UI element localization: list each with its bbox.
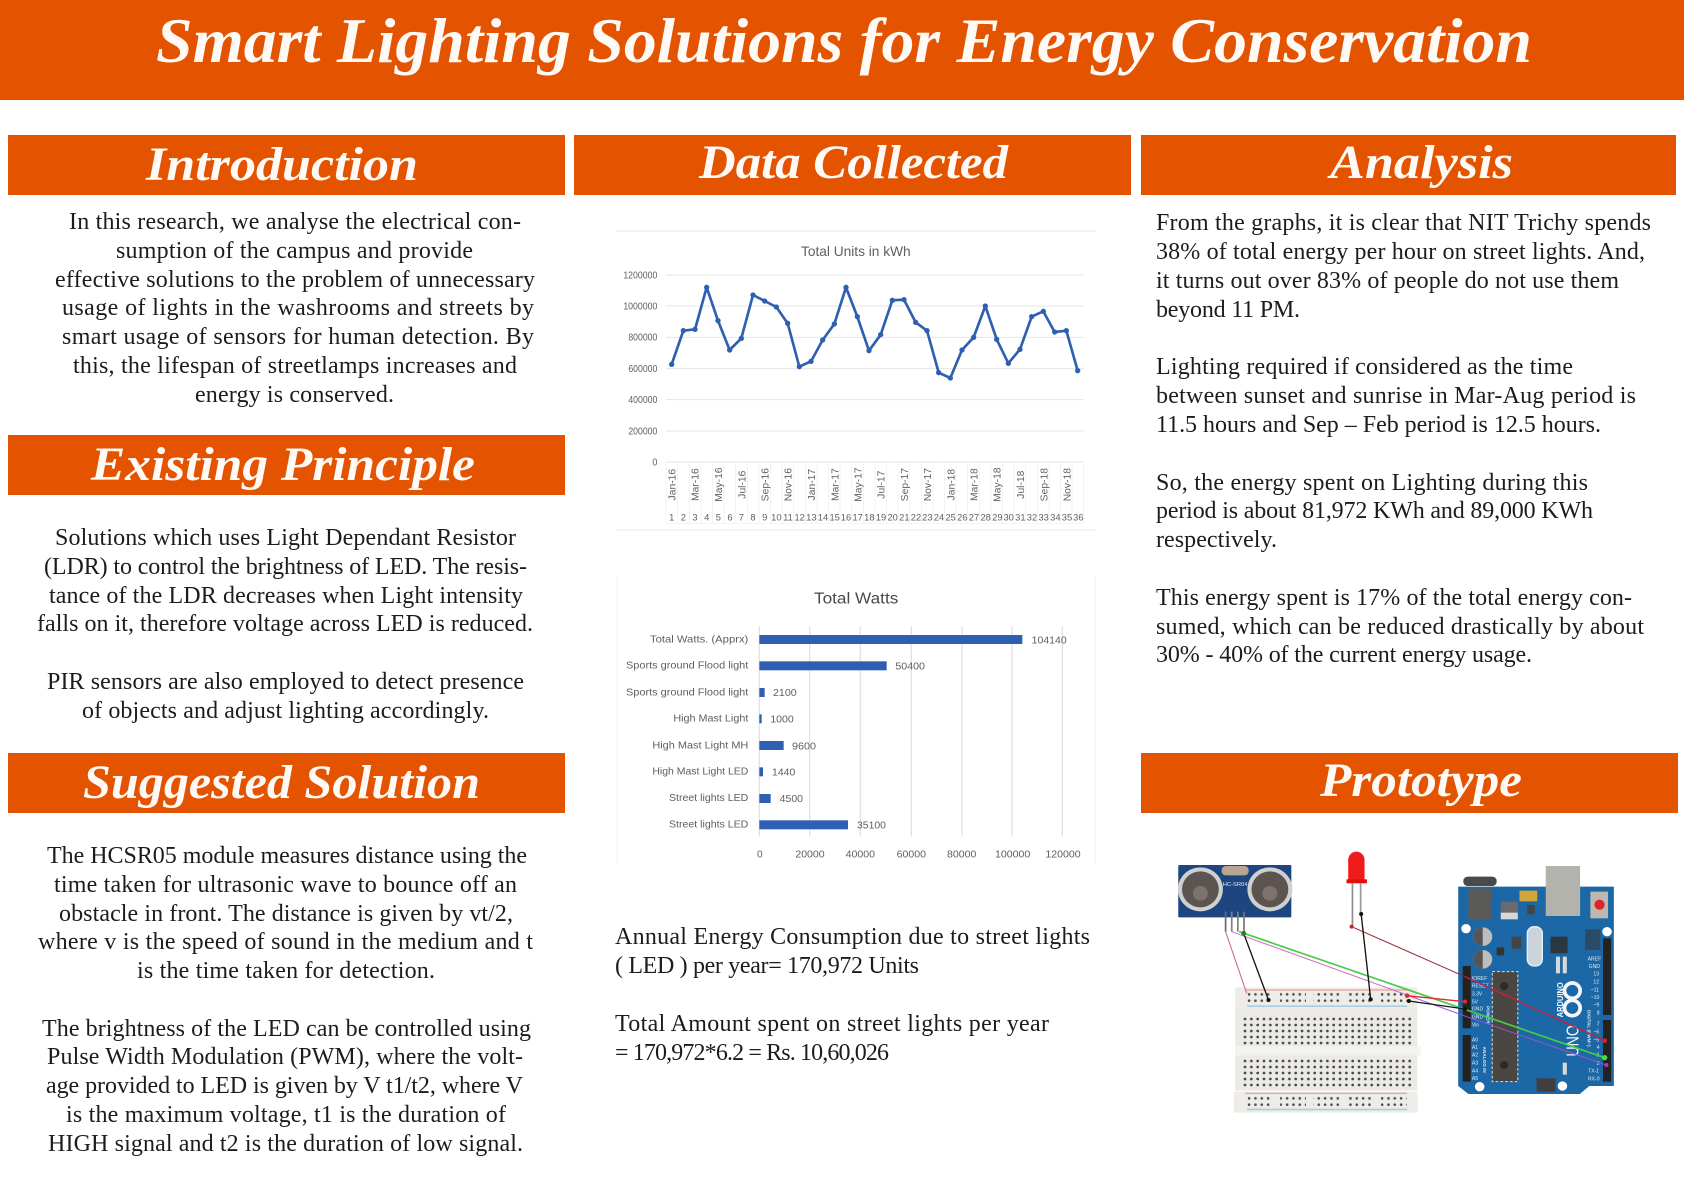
icon: red LED <box>1347 852 1367 927</box>
x axis index numbers: 26 <box>957 512 968 522</box>
value labels <box>770 635 1067 832</box>
x axis index numbers: 34 <box>1050 512 1061 522</box>
text block: existing principle body <box>37 525 533 724</box>
pin labels: AREF <box>1588 957 1601 963</box>
bars <box>759 635 1022 829</box>
pin labels: RESET <box>1472 983 1489 989</box>
text block: introduction body: effective solutions to the problem of unnecessary <box>55 267 535 293</box>
text block: introduction body: this, the lifespan of streetlamps increases and <box>73 353 517 379</box>
x axis labels: 40000 <box>846 849 875 860</box>
x axis index numbers: 6 <box>727 512 733 522</box>
pin labels: DIGITAL (PWM~) <box>1587 1010 1592 1047</box>
x axis index numbers: 1 <box>669 512 674 522</box>
value labels: 35100 <box>857 821 886 832</box>
text block: analysis body: 30% - 40% of the current energy usage. <box>1156 642 1532 668</box>
text block: suggested solution body: The brightness of the LED can be controlled using <box>42 1016 531 1042</box>
chart title: Total Units in kWh <box>801 243 911 259</box>
text block: introduction body <box>55 209 535 408</box>
pin labels: RX-0 <box>1588 1077 1600 1083</box>
x axis index numbers: 30 <box>1003 512 1014 522</box>
x axis index numbers: 3 <box>692 512 698 522</box>
text block: analysis body: beyond 11 PM. <box>1156 297 1300 323</box>
x axis labels: 0 <box>757 849 763 860</box>
heading: Introduction <box>8 135 565 195</box>
text block: analysis body: This energy spent is 17% of the total energy con- <box>1156 585 1632 611</box>
text block: existing principle body: Solutions which uses Light Dependant Resistor <box>55 525 516 551</box>
title: Smart Lighting Solutions for Energy Conservation <box>156 5 1532 76</box>
y axis labels <box>623 270 658 468</box>
text block: analysis body: period is about 81,972 KWh and 89,000 KWh <box>1156 498 1593 524</box>
heading: Prototype: Prototype <box>1319 754 1522 807</box>
text block: introduction body: smart usage of sensors for human detection. By <box>62 324 534 350</box>
x axis labels: 60000 <box>897 849 926 860</box>
pin labels: ~11 <box>1591 987 1599 993</box>
x axis index numbers: 9 <box>762 512 767 522</box>
pin labels: 2 <box>1597 1061 1600 1067</box>
pin labels: A0 <box>1472 1038 1478 1044</box>
text block: existing principle body: falls on it, therefore voltage across LED is reduced. <box>37 611 533 637</box>
x axis index numbers: 2 <box>681 512 686 522</box>
x axis month labels: Mar-17 <box>830 468 841 501</box>
value labels: 1440 <box>772 767 796 778</box>
text block: introduction body: usage of lights in the washrooms and streets by <box>62 295 534 321</box>
pin labels: A1 <box>1472 1045 1478 1051</box>
text block: analysis body: Lighting required if considered as the time <box>1156 354 1573 380</box>
pin labels: GND <box>1472 1014 1484 1020</box>
x axis index numbers: 17 <box>852 512 863 522</box>
category labels: Sports ground Flood light <box>626 661 749 672</box>
x axis index numbers: 14 <box>818 512 828 522</box>
x axis index numbers: 5 <box>716 512 721 522</box>
pin labels: A3 <box>1472 1060 1478 1066</box>
x axis index numbers: 25 <box>945 512 956 522</box>
y axis labels: 1000000 <box>623 301 658 312</box>
pin labels: 3.3V <box>1472 992 1483 998</box>
x axis index numbers: 7 <box>739 512 744 522</box>
text block: annual energy summary <box>615 924 1090 1066</box>
heading: Existing Principle: Existing Principle <box>90 438 475 491</box>
text block: annual energy summary: ( LED ) per year= 170,972 Units <box>615 953 919 979</box>
pin labels: ~10 <box>1591 995 1600 1001</box>
board wordmarks: ARDUINO <box>1556 982 1565 1017</box>
y axis labels: 0 <box>652 457 658 468</box>
chart title: Total Watts <box>814 590 899 607</box>
pin labels: A5 <box>1472 1076 1478 1082</box>
bar chart: total watts <box>617 577 1096 865</box>
x axis index numbers <box>669 512 1084 522</box>
icon: ultrasonic sensor HC-SR04 <box>1178 865 1292 933</box>
pin labels: A2 <box>1472 1053 1478 1059</box>
power jack <box>1463 877 1497 919</box>
heading: Analysis <box>1141 135 1676 195</box>
heading: Prototype <box>1141 753 1678 813</box>
infinity logo <box>1564 983 1580 1016</box>
icon: ultrasonic sensor HC-SR04: HC-SR04 <box>1223 882 1248 888</box>
board wordmarks: UNO <box>1562 1025 1582 1057</box>
x axis month labels: Nov-16 <box>784 468 795 501</box>
text block: analysis body: respectively. <box>1156 527 1277 553</box>
breadboard <box>1234 987 1421 1113</box>
category labels: Sports ground Flood light <box>626 687 749 698</box>
pin labels: 12 <box>1593 980 1599 986</box>
pin headers <box>1463 938 1611 1082</box>
x axis month labels: Mar-16 <box>691 468 702 501</box>
mounting holes <box>1461 924 1612 1091</box>
pin labels: ~5 <box>1593 1037 1599 1043</box>
panel: data collected <box>574 135 1131 1066</box>
panel: prototype <box>1141 753 1678 1113</box>
x axis index numbers: 20 <box>887 512 898 522</box>
heading: Suggested Solution: Suggested Solution <box>83 756 480 809</box>
x axis index numbers: 8 <box>750 512 756 522</box>
text block: introduction body: sumption of the campus and provide <box>116 238 473 264</box>
x axis month labels: Sep-16 <box>761 468 772 501</box>
x axis index numbers: 11 <box>783 512 793 522</box>
text block: existing principle body: (LDR) to control the brightness of LED. The resis- <box>44 554 527 580</box>
crystal <box>1527 927 1542 966</box>
text block: suggested solution body: is the maximum voltage, t1 is the duration of <box>66 1102 506 1128</box>
text block: existing principle body: PIR sensors are also employed to detect presence <box>47 669 524 695</box>
x axis month labels: Jan-17 <box>807 469 818 500</box>
x axis month labels: May-17 <box>853 467 864 502</box>
x axis index numbers: 21 <box>899 512 910 522</box>
value labels: 50400 <box>895 661 925 672</box>
x axis labels <box>757 849 1081 860</box>
y axis labels: 600000 <box>628 364 658 375</box>
x axis month labels: Sep-17 <box>900 468 911 501</box>
text block: introduction body: In this research, we analyse the electrical con- <box>69 209 521 235</box>
x axis index numbers: 16 <box>841 512 851 522</box>
category labels: High Mast Light LED <box>652 766 748 777</box>
panel: existing principle <box>8 435 565 724</box>
pin labels: 5V <box>1472 999 1479 1005</box>
heading: Introduction: Introduction <box>145 138 418 191</box>
panel: suggested solution <box>8 753 565 1157</box>
pin labels: ~9 <box>1593 1003 1599 1009</box>
USB port <box>1546 866 1580 916</box>
pin labels: 8 <box>1597 1010 1600 1016</box>
reset button <box>1590 892 1608 918</box>
y axis labels: 1200000 <box>623 270 658 281</box>
category labels: High Mast Light MH <box>652 740 748 751</box>
category labels: Total Watts. (Apprx) <box>650 635 748 646</box>
pin labels: GND <box>1589 964 1600 970</box>
x axis month labels: Jan-18 <box>946 469 957 500</box>
x axis index numbers: 29 <box>992 512 1003 522</box>
x axis index numbers: 23 <box>922 512 933 522</box>
x axis index numbers: 13 <box>806 512 817 522</box>
heading: Data Collected: Data Collected <box>698 136 1009 189</box>
text block: suggested solution body: The HCSR05 module measures distance using the <box>47 843 527 869</box>
x axis month labels: Sep-18 <box>1039 468 1050 501</box>
category labels: Street lights LED <box>669 820 748 831</box>
heading: Existing Principle <box>8 435 565 495</box>
value labels: 1000 <box>770 715 794 726</box>
x axis month labels: Jul-16 <box>737 470 748 499</box>
x axis month labels: Nov-17 <box>923 468 934 501</box>
pin labels: POWER <box>1485 1006 1491 1024</box>
capacitors <box>1473 927 1492 969</box>
pin labels: ~3 <box>1593 1053 1599 1059</box>
x axis month labels: Jul-17 <box>877 470 888 499</box>
value labels: 2100 <box>773 688 797 699</box>
x axis month labels: Nov-18 <box>1062 468 1073 501</box>
line chart: total units in kWh <box>616 230 1096 531</box>
text block: analysis body: 11.5 hours and Sep – Feb period is 12.5 hours. <box>1156 412 1601 438</box>
x axis index numbers: 15 <box>829 512 840 522</box>
x axis index numbers: 31 <box>1015 512 1026 522</box>
text block: analysis body: sumed, which can be reduced drastically by about <box>1156 614 1644 640</box>
pin labels <box>1472 957 1601 1083</box>
category labels <box>626 635 749 831</box>
pin labels: ANALOG IN <box>1482 1047 1487 1073</box>
value labels: 104140 <box>1032 635 1067 646</box>
pin labels: 4 <box>1597 1045 1600 1051</box>
connection wires <box>1226 912 1608 1067</box>
x axis labels: 20000 <box>795 849 825 860</box>
x axis month labels: Jul-18 <box>1016 470 1027 499</box>
x axis index numbers: 18 <box>864 512 875 522</box>
pin labels: 13 <box>1593 972 1599 978</box>
text block: introduction body: energy is conserved. <box>195 382 394 408</box>
microcontroller chip <box>1492 972 1518 1082</box>
pin labels: A4 <box>1472 1068 1478 1074</box>
text block: annual energy summary: Total Amount spent on street lights per year <box>615 1011 1049 1037</box>
pin labels: IOREF <box>1472 976 1487 982</box>
text block: suggested solution body: where v is the speed of sound in the medium and t <box>38 929 533 955</box>
x axis index numbers: 22 <box>911 512 921 522</box>
x axis index numbers: 10 <box>771 512 782 522</box>
y axis labels: 800000 <box>628 333 658 344</box>
heading: Analysis: Analysis <box>1327 136 1513 189</box>
text block: suggested solution body: Pulse Width Modulation (PWM), where the volt- <box>47 1044 523 1070</box>
text block: existing principle body: of objects and adjust lighting accordingly. <box>82 698 489 724</box>
pin labels: GND <box>1472 1007 1484 1013</box>
text block: suggested solution body: obstacle in front. The distance is given by vt/2, <box>59 901 513 927</box>
y axis labels: 400000 <box>628 395 658 406</box>
x axis index numbers: 4 <box>704 512 709 522</box>
x axis index numbers: 33 <box>1038 512 1049 522</box>
x axis labels: 100000 <box>995 849 1031 860</box>
x axis month labels <box>667 467 1073 502</box>
panel: analysis <box>1141 135 1676 668</box>
text block: analysis body: From the graphs, it is clear that NIT Trichy spends <box>1156 210 1651 236</box>
category labels: High Mast Light <box>673 714 749 725</box>
x axis index numbers: 32 <box>1027 512 1037 522</box>
text block: suggested solution body: age provided to LED is given by V t1/t2, where V <box>46 1073 524 1099</box>
x axis index numbers: 28 <box>980 512 991 522</box>
x axis labels: 120000 <box>1045 849 1081 860</box>
heading: Suggested Solution <box>8 753 565 813</box>
text block: existing principle body: tance of the LDR decreases when Light intensity <box>49 583 523 609</box>
value labels: 9600 <box>792 741 816 752</box>
value labels: 4500 <box>780 794 803 805</box>
heading: Data Collected <box>574 135 1131 195</box>
pin labels: Vin <box>1472 1023 1479 1029</box>
pin labels: TX-1 <box>1588 1069 1599 1075</box>
board wordmarks <box>1556 982 1582 1057</box>
x axis index numbers: 36 <box>1073 512 1084 522</box>
title banner <box>0 0 1684 100</box>
x axis index numbers: 19 <box>876 512 886 522</box>
x axis month labels: May-16 <box>714 467 725 502</box>
text block: analysis body: between sunset and sunrise in Mar-Aug period is <box>1156 383 1636 409</box>
text block: annual energy summary: = 170,972*6.2 = Rs. 10,60,026 <box>615 1040 889 1066</box>
x axis labels: 80000 <box>947 849 977 860</box>
text block: annual energy summary: Annual Energy Consumption due to street lights <box>615 924 1090 950</box>
x axis index numbers: 12 <box>794 512 805 522</box>
x axis index numbers: 24 <box>934 512 944 522</box>
panel: introduction <box>8 135 565 408</box>
icon: Arduino Uno board <box>1458 866 1614 1094</box>
text block: suggested solution body <box>38 843 533 1157</box>
text block: suggested solution body: is the time taken for detection. <box>137 958 435 984</box>
prototype circuit diagram <box>1178 852 1614 1113</box>
x axis index numbers: 27 <box>969 512 979 522</box>
x axis month labels: May-18 <box>993 467 1004 502</box>
x axis month labels: Mar-18 <box>970 468 981 501</box>
text block: analysis body <box>1156 210 1651 668</box>
y axis labels: 200000 <box>628 426 658 437</box>
x axis month labels: Jan-16 <box>667 469 678 500</box>
x axis index numbers: 35 <box>1062 512 1072 522</box>
text block: analysis body: it turns out over 83% of people do not use them <box>1156 268 1619 294</box>
text block: analysis body: So, the energy spent on Lighting during this <box>1156 470 1588 496</box>
pin labels: 7 <box>1597 1021 1600 1027</box>
data line <box>669 285 1080 381</box>
text block: suggested solution body: HIGH signal and t2 is the duration of low signal. <box>48 1131 523 1157</box>
text block: suggested solution body: time taken for ultrasonic wave to bounce off an <box>54 872 517 898</box>
category labels: Street lights LED <box>669 793 748 804</box>
text block: analysis body: 38% of total energy per hour on street lights. And, <box>1156 239 1645 265</box>
pin labels: ~6 <box>1593 1029 1599 1035</box>
